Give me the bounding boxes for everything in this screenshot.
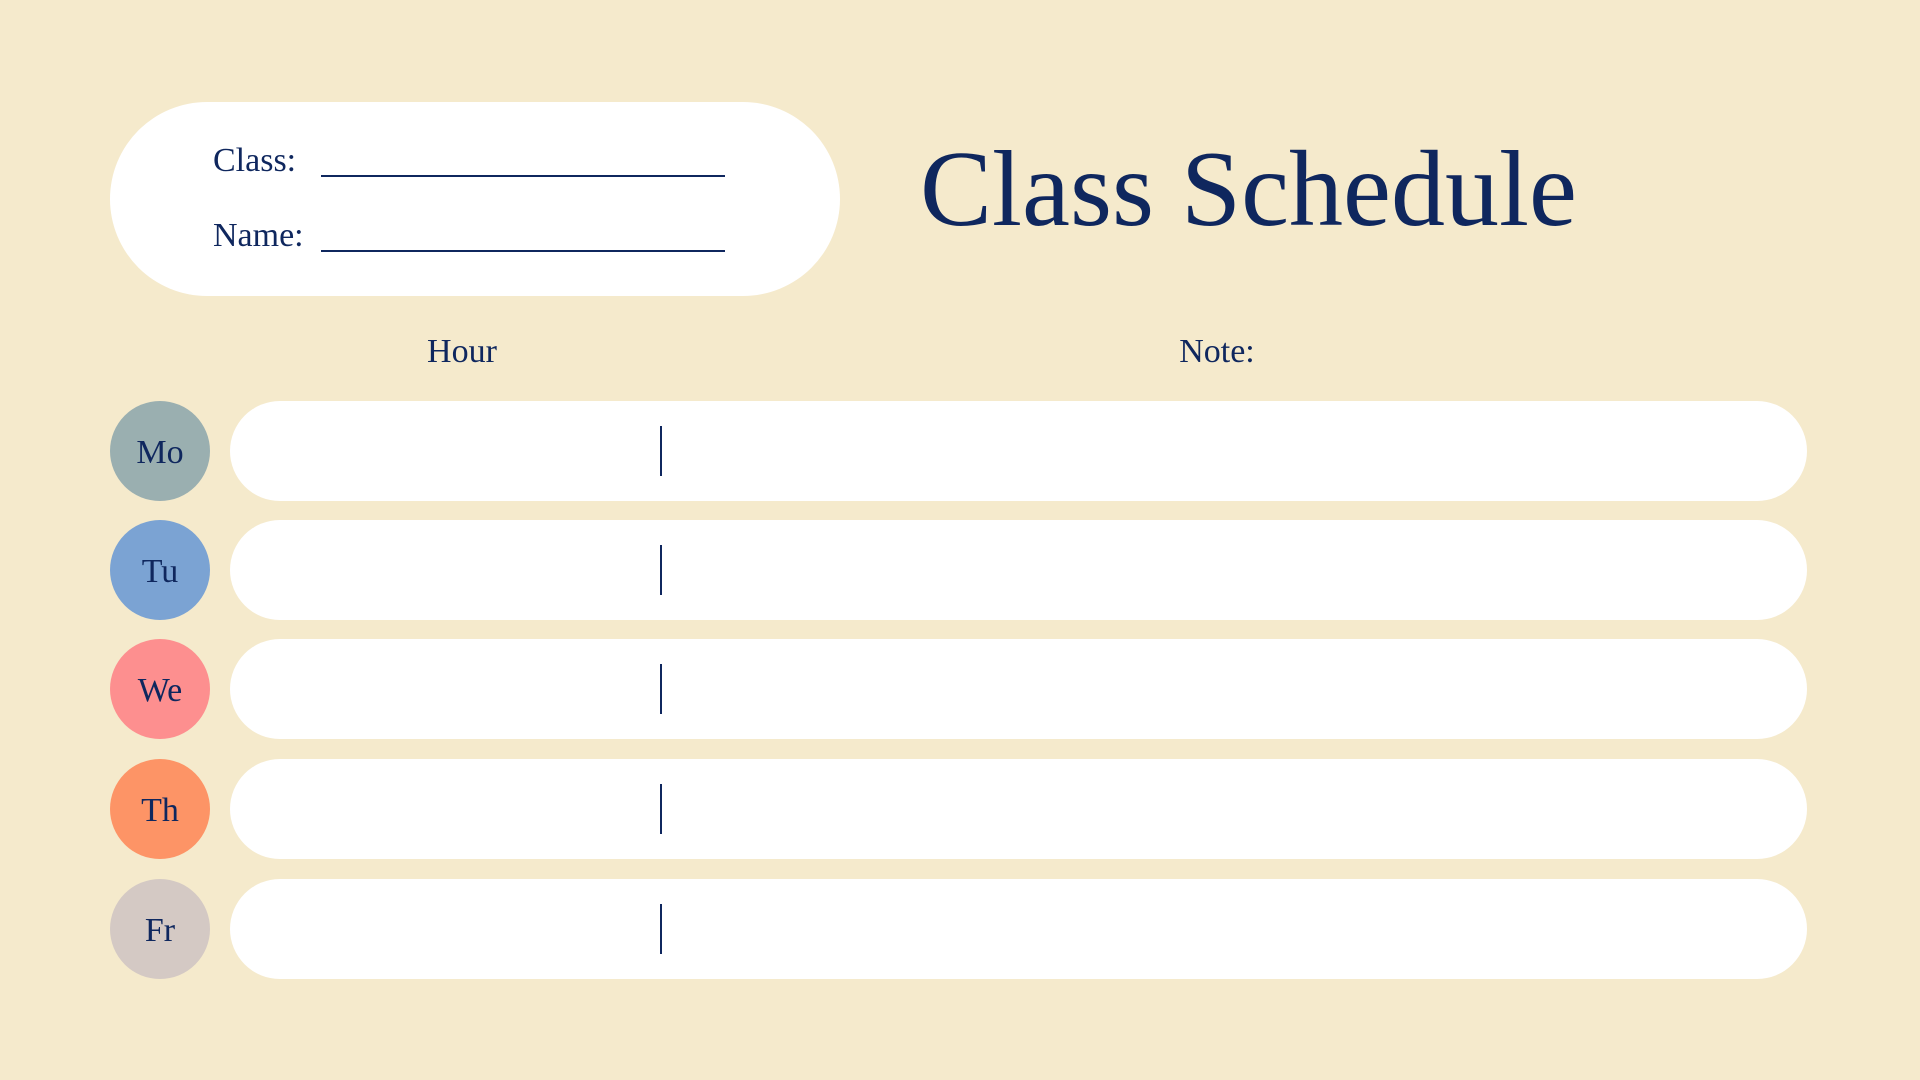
pill: Tuesday row (230, 520, 1807, 620)
circle: Fr: Fr (145, 912, 175, 949)
text: class field: Class: (213, 142, 296, 179)
circle: We: We (138, 672, 182, 709)
line: class blank (321, 175, 725, 177)
circle: Fr (110, 879, 210, 979)
line: name blank (321, 250, 725, 252)
text: name field: Name: (213, 217, 304, 254)
pill: Monday row (230, 401, 1807, 501)
panel: class/name header (110, 102, 840, 296)
circle: Tu (110, 520, 210, 620)
circle: Th (110, 759, 210, 859)
title: Class Schedule (920, 130, 1577, 249)
circle: Tu: Tu (142, 553, 178, 590)
circle: Mo (110, 401, 210, 501)
circle: Th: Th (141, 792, 179, 829)
pill: Friday row (230, 879, 1807, 979)
circle: We (110, 639, 210, 739)
pill: Wednesday row (230, 639, 1807, 739)
heading: hour: Hour (427, 333, 497, 370)
heading: note: Note: (1179, 333, 1255, 370)
pill: Thursday row (230, 759, 1807, 859)
circle: Mo: Mo (136, 434, 184, 471)
